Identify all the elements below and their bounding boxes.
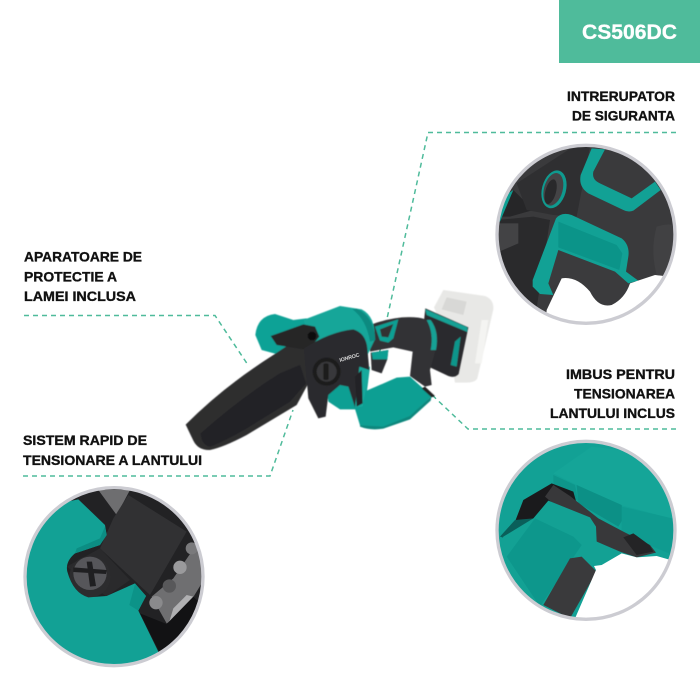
circle content [498,147,674,312]
model badge: CS506DC [582,21,677,44]
rear motor body [255,314,313,355]
ghost battery [434,290,493,383]
bit [545,485,656,557]
dark area under plate [547,249,637,308]
circle ring [497,441,675,619]
label: quick chain tensioning: TENSIONARE A LANTULUI [23,452,202,468]
label: blade guard [24,248,142,304]
label: quick chain tensioning [23,432,202,468]
label: blade guard: PROTECTIE A [24,268,117,284]
guard clip [271,324,319,350]
detail circle: hex key [495,440,677,621]
label: quick chain tensioning: SISTEM RAPID DE [23,432,147,448]
label: safety switch [567,88,675,124]
front holder [503,500,600,544]
battery adapter [423,308,468,377]
dashed leader: blade guard [24,316,248,365]
saw body [186,306,468,450]
label: safety switch: DE SIGURANTA [572,108,675,124]
top teal band [580,148,661,212]
dashed leader: quick tensioning [23,410,293,476]
teal guard [26,499,158,664]
label: blade guard: LAMEI INCLUSA [24,288,136,304]
switch button [541,170,567,208]
circle ring [25,488,203,666]
label: hex key [550,366,675,421]
guide bar cover [186,342,308,450]
white cut-out [546,275,663,322]
teal trigger plate [533,214,638,295]
chain [149,542,207,623]
trigger [371,350,388,373]
detail circle: quick tensioning [23,486,205,668]
label: hex key: TENSIONAREA [574,386,675,402]
dashed leader: safety switch [379,132,676,355]
key holder plate [353,377,432,428]
brand: IONROC [339,352,361,364]
dark cavity [516,483,576,520]
sprocket cover [304,329,369,418]
label: blade guard: APARATOARE DE [24,248,142,264]
dashed leader: hex key [431,394,676,429]
label: hex key: IMBUS PENTRU [566,366,675,382]
screw [70,558,102,597]
black bar plate [100,495,187,595]
chainsaw product image [186,290,493,450]
circle content [26,489,202,664]
model badge [559,0,700,63]
white cut-out [576,553,668,618]
rear handle [370,317,437,387]
tension knob [313,358,341,386]
circle content [498,443,674,617]
detail circle: safety switch [495,144,677,325]
black block [543,557,597,618]
label: safety switch: INTRERUPATOR [567,88,675,104]
label: hex key: LANTULUI INCLUS [550,405,675,421]
circle ring [497,145,675,323]
